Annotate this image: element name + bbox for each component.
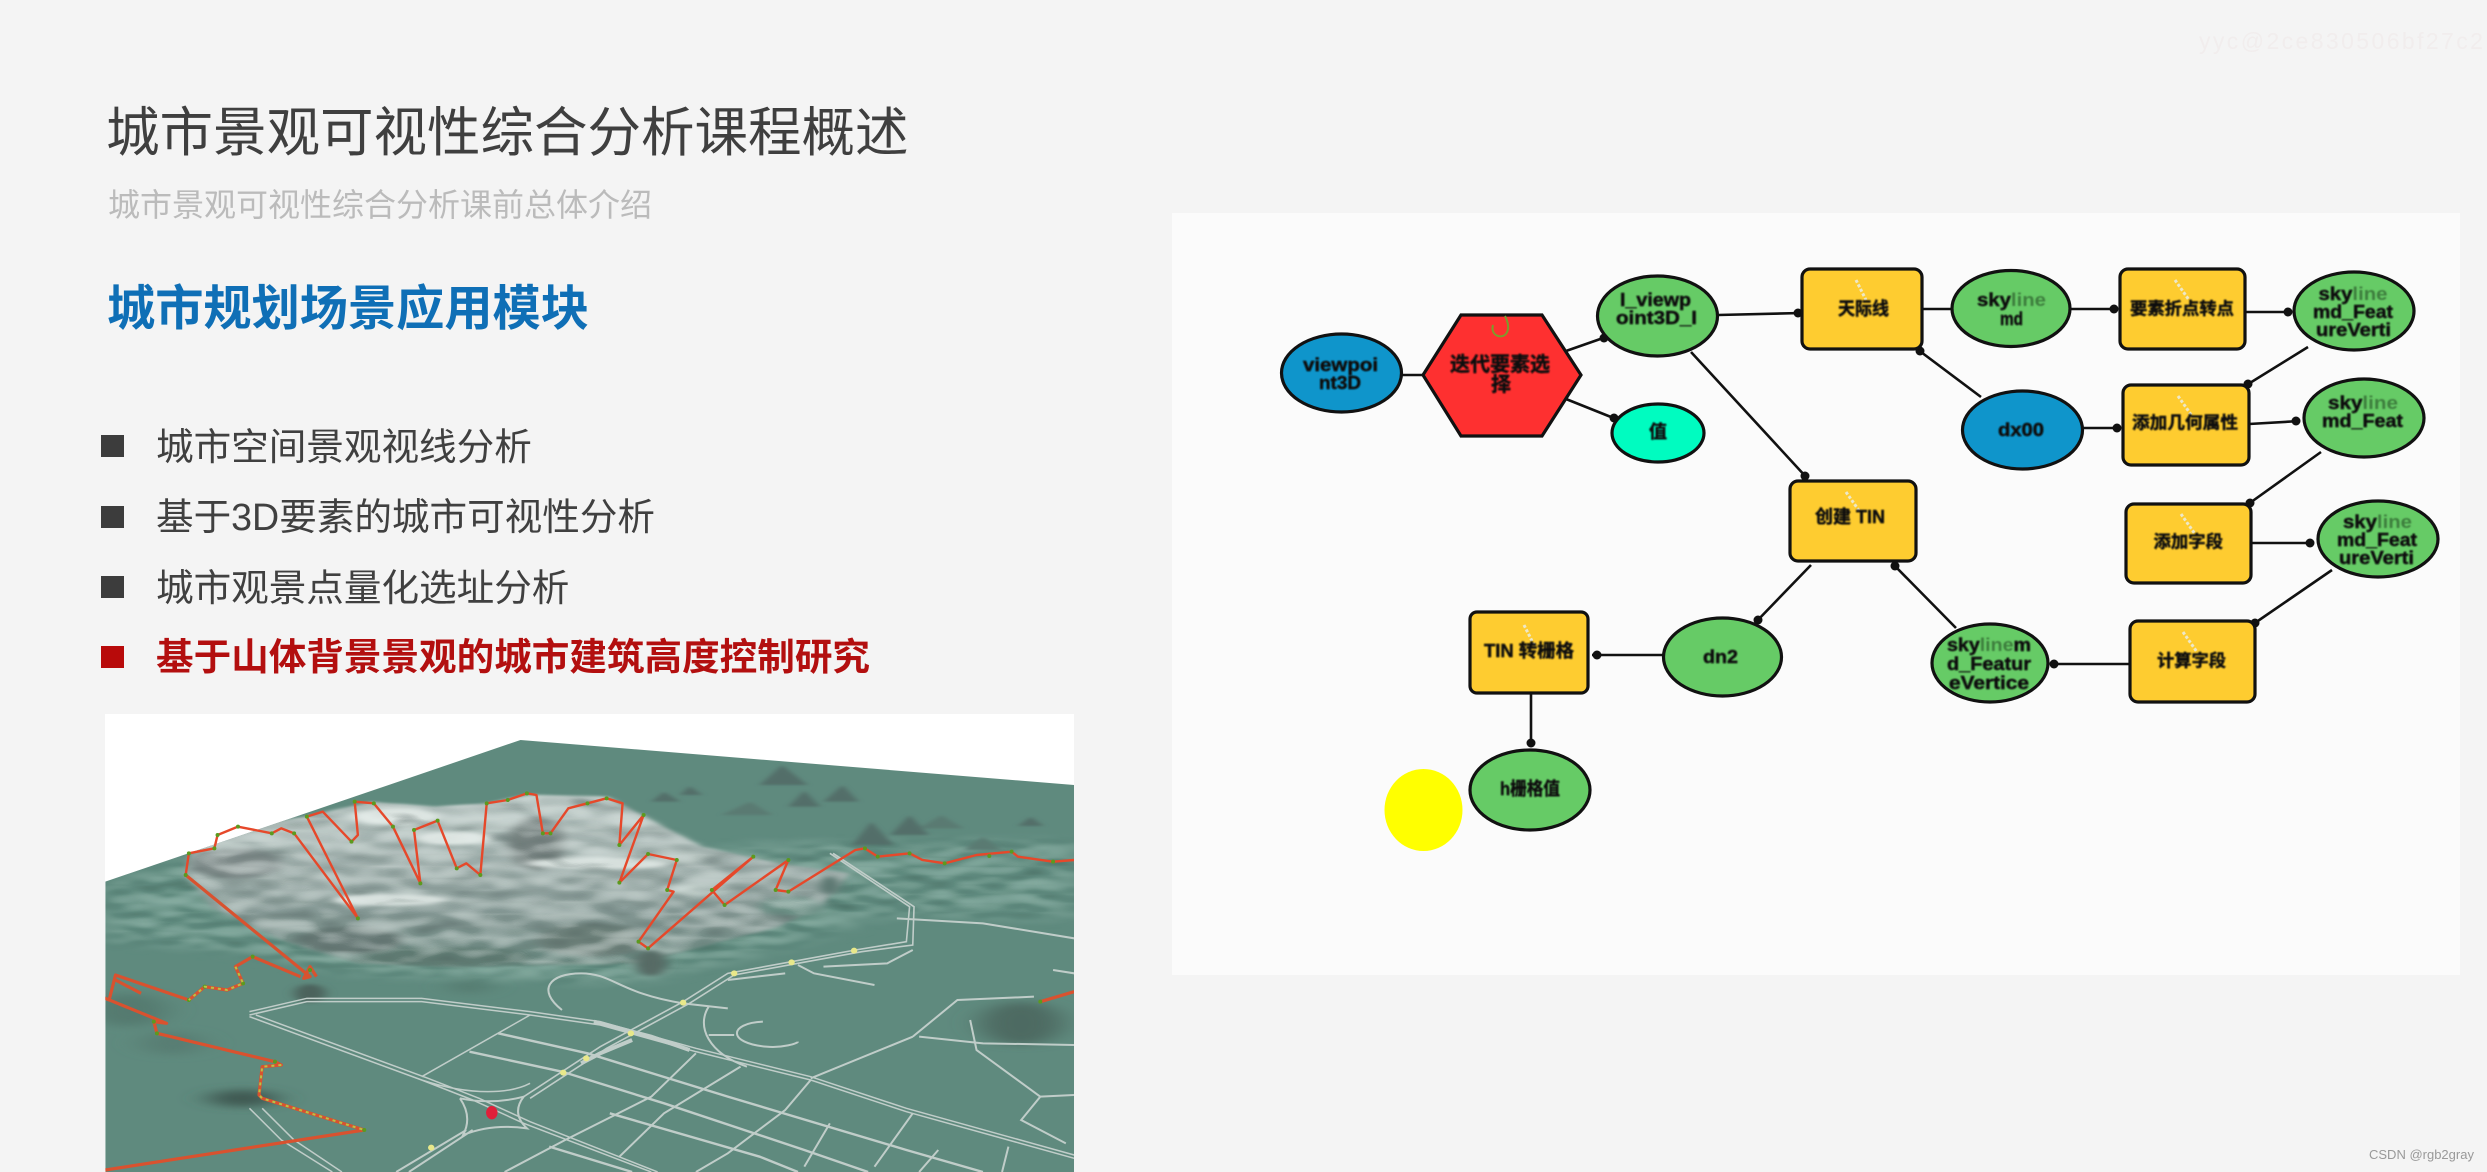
- tool: skyline: [1802, 269, 1922, 349]
- 3D terrain skyline image: [105, 714, 1074, 1172]
- data: skylined_FeatureVerti: ureVerti: [2316, 320, 2391, 340]
- output: value: [1612, 404, 1704, 462]
- input: viewpoint3D: viewpoi: [1303, 355, 1378, 375]
- data: skylined_Feat: [2304, 379, 2424, 457]
- data: skylined: skyline: [1977, 290, 2046, 310]
- output: h raster: [1470, 750, 1590, 830]
- watermark top right: yyc@2ce830506bf27c2: [2199, 28, 2485, 54]
- tool: skyline: 天际线: [1838, 299, 1889, 319]
- data: skylined_FeatureVertice: [1932, 624, 2048, 702]
- subtitle: 城市景观可视性综合分析课前总体介绍: [108, 187, 652, 223]
- yellow highlight circle: [1384, 769, 1462, 851]
- tool: add field: [2126, 504, 2251, 583]
- data: skylined_FeatureVerti: [2294, 272, 2414, 350]
- tool: create TIN: [1790, 481, 1916, 561]
- data: skylined_Feat: md_Feat: [2322, 411, 2403, 431]
- source credit: CSDN @rgb2gray: [2369, 1147, 2474, 1162]
- iterator hexagon: 择: [1491, 373, 1511, 396]
- tool: feature vertices to points: 要素折点转点: [2130, 300, 2234, 318]
- section heading: 城市规划场景应用模块: [107, 282, 589, 336]
- tool: calculate field: 计算字段: [2157, 650, 2226, 670]
- data: skylined_FeatureVertice: skylinem: [1947, 635, 2031, 655]
- data: skylined_FeatureVerti 2: md_Feat: [2337, 530, 2417, 550]
- input: viewpoint3D: [1282, 334, 1402, 412]
- output: i_viewpoint3D_I: [1598, 276, 1718, 356]
- data: skylined_FeatureVerti 2: [2318, 501, 2438, 577]
- data: dn2: [1664, 618, 1782, 696]
- tool: add field: 添加字段: [2154, 532, 2223, 552]
- input: dx00: dx00: [1998, 420, 2044, 440]
- title: 城市景观可视性综合分析课程概述: [106, 104, 908, 163]
- iterator hexagon: 迭代要素选: [1450, 353, 1550, 376]
- tool: add geometry attributes: 添加几何属性: [2132, 414, 2238, 432]
- data: skylined_FeatureVerti: skyline: [2318, 284, 2388, 304]
- tool: add geometry attributes: [2123, 385, 2249, 465]
- model builder flowchart: [1280, 267, 2440, 851]
- data: skylined_Feat: skyline: [2328, 393, 2398, 413]
- tool: TIN to raster: TIN 转栅格: [1484, 641, 1574, 661]
- data: skylined_FeatureVerti 2: skyline: [2343, 512, 2412, 532]
- data: skylined_FeatureVertice: eVertice: [1949, 673, 2029, 693]
- output: i_viewpoint3D_I: I_viewp: [1620, 290, 1691, 310]
- output: i_viewpoint3D_I: oint3D_I: [1616, 308, 1697, 328]
- data: skylined_FeatureVerti: md_Feat: [2313, 302, 2393, 322]
- road network: [249, 853, 1074, 1172]
- bullet list: [101, 426, 870, 678]
- tool: TIN to raster: [1470, 612, 1588, 693]
- connector arrows: [1402, 304, 2332, 748]
- data: dn2: dn2: [1703, 647, 1738, 667]
- tool: create TIN: 创建 TIN: [1815, 507, 1885, 527]
- data: skylined: [1952, 270, 2070, 346]
- viewpoint markers: [428, 948, 857, 1151]
- data: skylined: md: [2000, 309, 2023, 329]
- output: value: 值: [1649, 422, 1667, 442]
- tool: calculate field: [2130, 621, 2255, 702]
- bullet item 1: 城市空间景观视线分析: [156, 426, 532, 468]
- data: skylined_FeatureVertice: d_Featur: [1947, 654, 2031, 674]
- input: dx00: [1962, 391, 2082, 469]
- bullet item 2: 基于3D要素的城市可视性分析: [156, 496, 655, 538]
- red skyline visibility line: [105, 793, 1074, 1170]
- data: skylined_FeatureVerti 2: ureVerti: [2339, 548, 2414, 568]
- model builder panel background: [1172, 213, 2460, 975]
- ground plane: [105, 740, 1074, 1172]
- bullet item 4 highlighted: 基于山体背景景观的城市建筑高度控制研究: [156, 636, 870, 678]
- input: viewpoint3D: nt3D: [1319, 373, 1361, 393]
- tool: feature vertices to points: [2120, 269, 2245, 349]
- output: h raster: h栅格值: [1500, 779, 1560, 799]
- iterator hexagon: [1423, 315, 1581, 436]
- mountain massif: [90, 765, 1074, 1107]
- bullet item 3: 城市观景点量化选址分析: [156, 567, 569, 609]
